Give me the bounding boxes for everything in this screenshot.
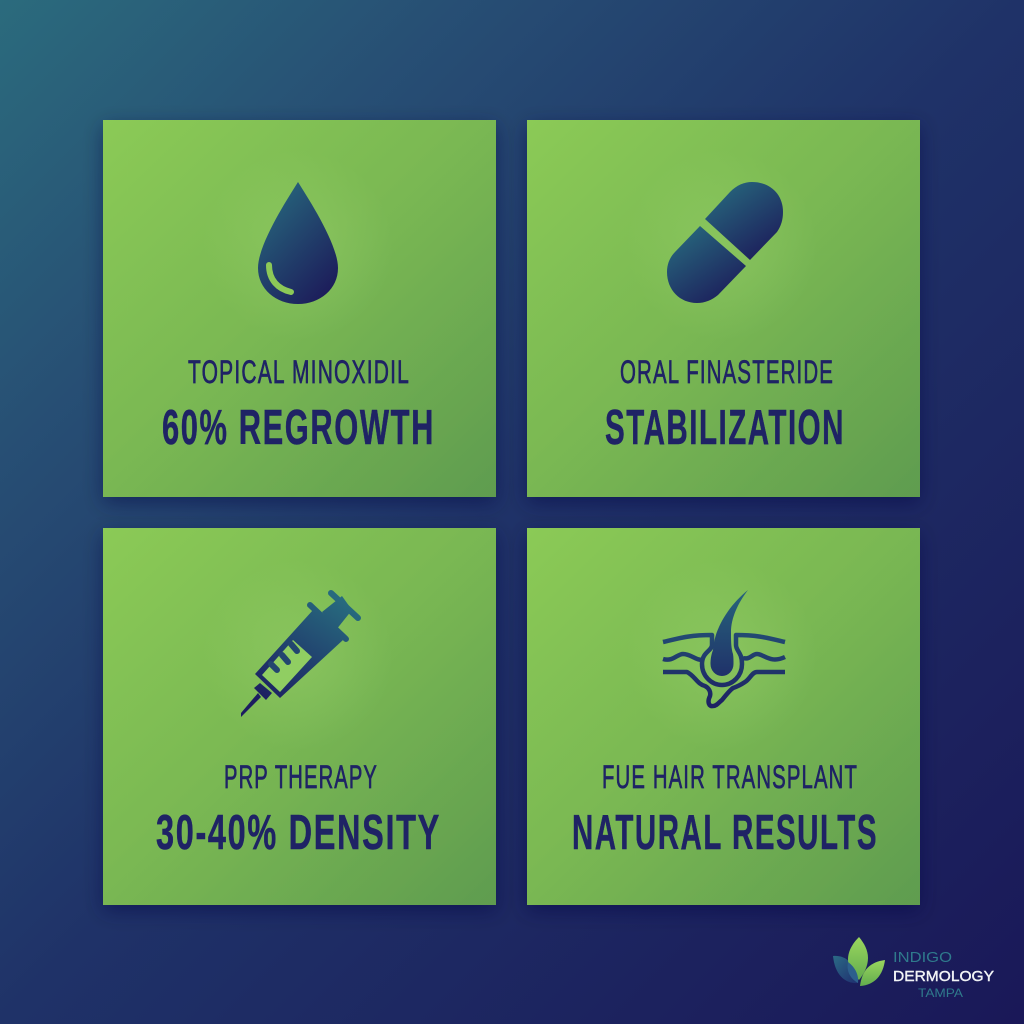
label: oral finasteride: ORAL FINASTERIDE xyxy=(620,354,834,390)
logo: indigo dermology tampa xyxy=(833,937,994,1000)
value: 30-40% density: 30-40% DENSITY xyxy=(156,806,441,860)
label: topical minoxidil: TOPICAL MINOXIDIL xyxy=(188,354,410,390)
icon: hair follicle xyxy=(663,590,785,706)
panel: topical minoxidil xyxy=(103,120,496,497)
icon: water drop xyxy=(258,182,338,304)
label: fue hair transplant: FUE HAIR TRANSPLANT xyxy=(602,759,858,795)
value: 60% regrowth: 60% REGROWTH xyxy=(162,401,435,455)
icon: syringe xyxy=(241,593,358,717)
value: stabilization: STABILIZATION xyxy=(605,401,845,455)
brand: dermology: DERMOLOGY xyxy=(893,968,994,985)
brand: tampa: TAMPA xyxy=(918,986,963,1000)
panel: prp therapy xyxy=(103,528,496,905)
panel: fue hair transplant xyxy=(527,528,920,905)
brand: indigo: INDIGO xyxy=(893,949,952,966)
icon: leaves xyxy=(833,937,885,986)
label: prp therapy: PRP THERAPY xyxy=(224,759,378,795)
panel: oral finasteride xyxy=(527,120,920,497)
icon: capsule xyxy=(667,182,783,303)
